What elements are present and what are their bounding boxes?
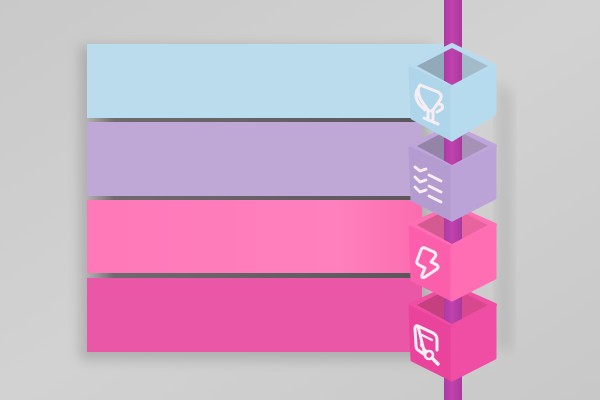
soft wall shadows bbox=[80, 46, 512, 360]
vertical rod bbox=[444, 0, 462, 400]
cube: magenta with document search icon bbox=[410, 285, 495, 380]
panel: magenta bar bbox=[87, 278, 422, 352]
cube: pink with lightning icon bbox=[410, 205, 495, 300]
panel: pink bar bbox=[87, 200, 422, 278]
icon: lightning bolt bbox=[417, 248, 438, 278]
cube: blue with trophy icon bbox=[410, 44, 495, 140]
cube: purple with checklist icon bbox=[410, 125, 495, 220]
icon: checklist bbox=[415, 167, 441, 202]
panel: blue bar bbox=[87, 44, 444, 122]
icon: trophy cup bbox=[416, 85, 442, 124]
panel: purple bar bbox=[87, 122, 422, 200]
icon: document with magnifier bbox=[415, 326, 438, 364]
